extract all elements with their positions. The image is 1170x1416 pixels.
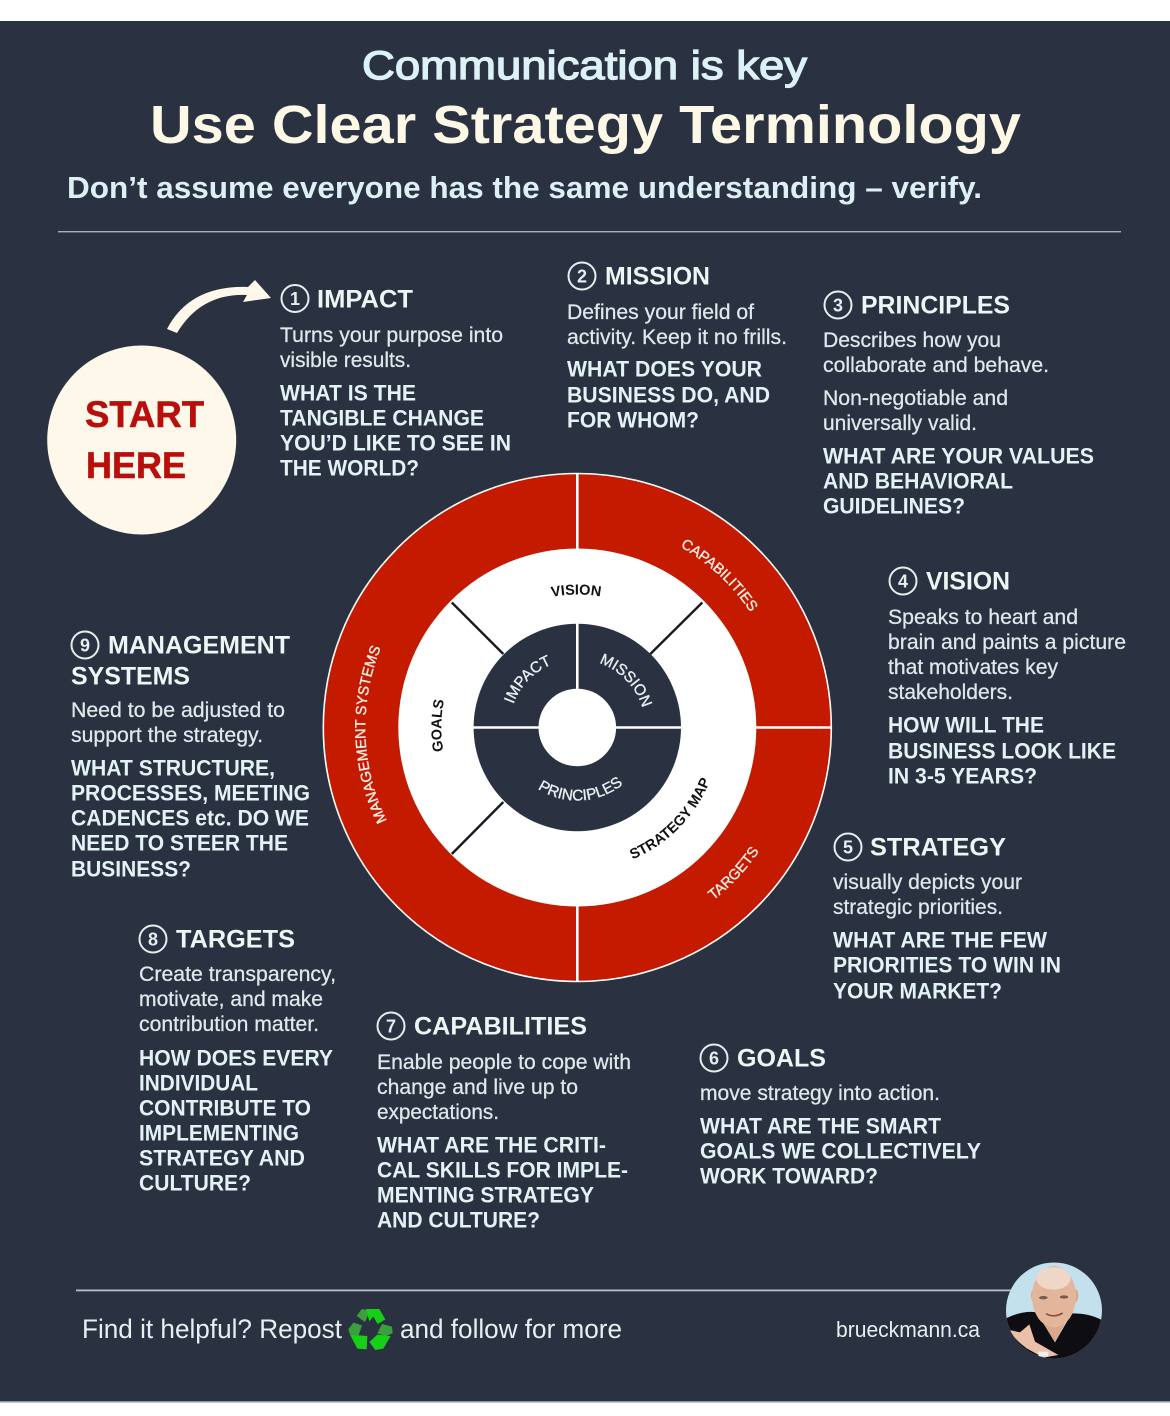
panel: 3 principles: 3 [833,296,843,316]
panel: 5 strategy: STRATEGY [870,834,1006,862]
panel: 6 goals [700,1044,981,1188]
panel: 5 strategy: visually depicts your [833,871,1022,894]
panel: 1 impact: THE WORLD? [280,456,419,480]
panel: 5 strategy [833,834,1061,1004]
panel: 2 mission: activity. Keep it no frills. [567,326,787,349]
panel: 4 vision: that motivates key [888,656,1058,679]
panel: 6 goals: 6 [709,1048,719,1068]
panel: 6 goals: WORK TOWARD? [700,1164,878,1188]
panel: 7 capabilities: CAPABILITIES [414,1012,587,1040]
footer: and follow for more [400,1314,622,1344]
panel: 6 goals: move strategy into action. [700,1082,940,1105]
label: management systems: MANAGEMENT SYSTEMS [355,646,387,824]
panel: 2 mission: BUSINESS DO, AND [567,382,770,408]
panel: 2 mission: Defines your field of [567,301,754,324]
panel: 9 management systems: WHAT STRUCTURE, [71,756,275,780]
panel: 8 targets: INDIVIDUAL [139,1070,258,1096]
portrait [1004,1261,1104,1362]
kicker heading: Communication is key [362,44,807,88]
panel: 4 vision: Speaks to heart and [888,606,1078,629]
panel: 4 vision: 4 [898,572,908,592]
panel: 1 impact: WHAT IS THE [280,380,416,406]
panel: 4 vision: HOW WILL THE [888,712,1044,738]
panel: 7 capabilities: 7 [386,1016,396,1036]
panel: 3 principles: universally valid. [823,412,977,435]
panel: 9 management systems: PROCESSES, MEETING [71,780,310,806]
panel: 1 impact: YOU’D LIKE TO SEE IN [280,430,511,456]
panel: 8 targets: CONTRIBUTE TO [139,1096,311,1120]
panel: 1 impact: Turns your purpose into [280,324,503,347]
panel: 7 capabilities [377,1012,631,1232]
panel: 4 vision: VISION [926,568,1010,596]
footer [76,1261,1104,1362]
panel: 8 targets: STRATEGY AND [139,1146,305,1170]
chart: concentric strategy wheel [322,472,832,982]
panel: 4 vision: IN 3-5 YEARS? [888,764,1037,788]
panel: 6 goals: GOALS [737,1044,826,1072]
panel: 2 mission: MISSION [605,262,710,290]
panel: 8 targets: Create transparency, [139,963,336,986]
panel: 8 targets: HOW DOES EVERY [139,1046,333,1070]
start here badge [47,346,236,534]
panel: 9 management systems: MANAGEMENT [108,632,290,660]
panel: 9 management systems: support the strategy. [71,724,263,747]
label: mission: MISSION [600,653,652,707]
panel: 4 vision: BUSINESS LOOK LIKE [888,738,1116,764]
inner ring: navy [474,624,681,831]
panel: 6 goals: GOALS WE COLLECTIVELY [700,1138,981,1164]
inner ring dividers [473,624,681,728]
panel: 8 targets [139,926,336,1196]
panel: 8 targets: CULTURE? [139,1170,251,1196]
label: impact: IMPACT [504,654,548,704]
label: targets: TARGETS [707,846,758,898]
panel: 8 targets: motivate, and make [139,988,323,1011]
panel: 9 management systems: BUSINESS? [71,856,191,882]
footer call to action: Find it helpful? Repost [82,1314,342,1344]
panel: 8 targets: 8 [148,930,158,950]
panel: 8 targets: TARGETS [176,926,295,954]
panel: 5 strategy: YOUR MARKET? [833,978,1002,1004]
panel: 8 targets: contribution matter. [139,1013,319,1036]
panel: 7 capabilities: AND CULTURE? [377,1208,540,1232]
panel: 2 mission: FOR WHOM? [567,408,699,432]
title block [67,44,1021,205]
panel: 4 vision: stakeholders. [888,681,1013,704]
panel: 1 impact: IMPACT [317,286,413,314]
panel: 3 principles: Non-negotiable and [823,387,1008,410]
panel: 3 principles: Describes how you [823,329,1001,352]
centre circle [538,689,616,766]
start here badge: HERE [86,445,186,486]
panel: 2 mission: WHAT DOES YOUR [567,356,762,382]
panel: 1 impact [280,285,511,480]
panel: 7 capabilities: expectations. [377,1101,499,1124]
outer ring: red [323,474,831,982]
start here badge: START [85,394,204,435]
panel: 5 strategy: WHAT ARE THE FEW [833,928,1047,952]
panel: 5 strategy: PRIORITIES TO WIN IN [833,952,1061,978]
label: capabilities: CAPABILITIES [682,540,758,611]
panel: 4 vision: brain and paints a picture [888,631,1126,654]
label: goals: GOALS [431,700,444,752]
panel: 3 principles [823,292,1094,518]
website: brueckmann.ca [836,1317,981,1342]
icon: recycle [348,1309,393,1350]
arrow: start to impact [167,280,271,333]
panel: 9 management systems [71,632,310,882]
panel: 1 impact: 1 [290,289,300,309]
panel: 7 capabilities: change and live up to [377,1076,578,1099]
panel: 8 targets: IMPLEMENTING [139,1120,299,1146]
panel: 9 management systems: CADENCES etc. DO WE [71,806,309,830]
label: principles: PRINCIPLES [538,777,622,801]
outer ring dividers [577,474,831,982]
panel: 1 impact: TANGIBLE CHANGE [280,406,484,430]
panel: 5 strategy: 5 [843,838,853,858]
panel: 7 capabilities: WHAT ARE THE CRITI- [377,1132,606,1158]
subtitle: Don’t assume everyone has the same understanding – verify. [67,170,982,205]
panel: 9 management systems: Need to be adjusted to [71,699,285,722]
panel: 2 mission: 2 [577,266,587,286]
panel: 3 principles: AND BEHAVIORAL [823,468,1013,494]
panel: 7 capabilities: MENTING STRATEGY [377,1182,594,1208]
main title: Use Clear Strategy Terminology [150,95,1021,155]
panel: 5 strategy: strategic priorities. [833,896,1003,919]
panel: 4 vision [888,568,1126,788]
panel: 9 management systems: SYSTEMS [71,662,190,690]
panel: 9 management systems: 9 [80,636,90,656]
panel: 2 mission [567,262,787,432]
panel: 3 principles: GUIDELINES? [823,494,965,518]
panel: 9 management systems: NEED TO STEER THE [71,830,288,856]
label: strategy map: STRATEGY MAP [630,778,708,858]
panel: 7 capabilities: CAL SKILLS FOR IMPLE- [377,1158,628,1182]
panel: 1 impact: visible results. [280,349,411,372]
label: vision: VISION [550,584,601,596]
panel: 3 principles: PRINCIPLES [861,292,1010,320]
panel: 3 principles: collaborate and behave. [823,354,1049,377]
panel: 6 goals: WHAT ARE THE SMART [700,1114,942,1138]
middle ring dividers [452,602,702,854]
middle ring: white [398,548,756,906]
panel: 3 principles: WHAT ARE YOUR VALUES [823,444,1094,468]
panel: 7 capabilities: Enable people to cope with [377,1051,631,1074]
